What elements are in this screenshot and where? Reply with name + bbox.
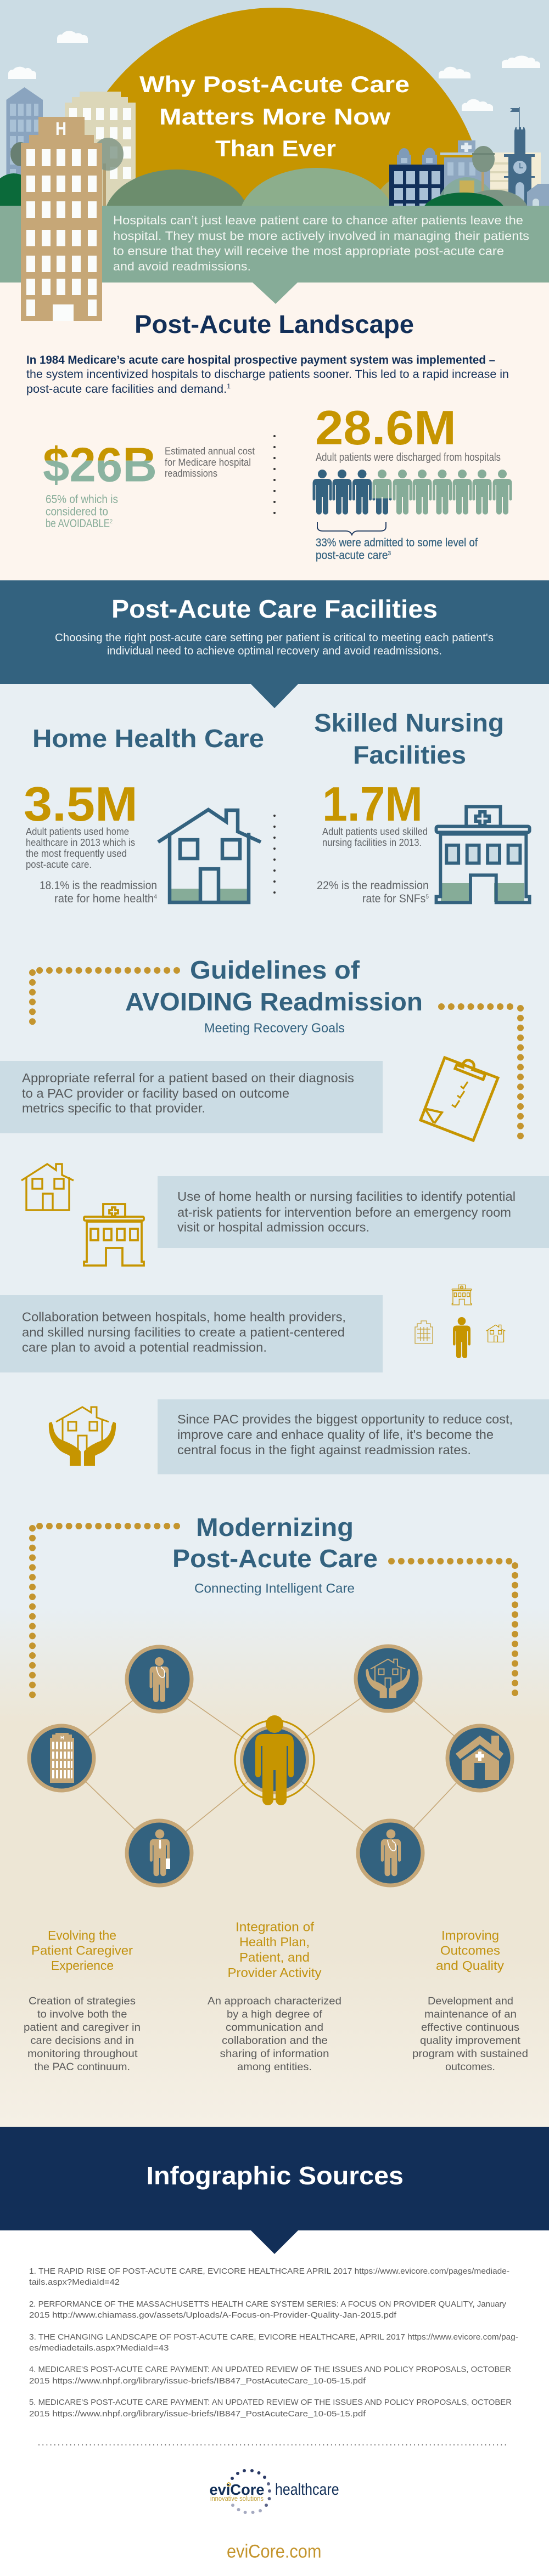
node: central patient <box>235 1715 314 1805</box>
text block: 33% admitted: 3 <box>388 550 391 557</box>
icon: small hospital <box>84 1204 144 1266</box>
column: improving outcomes <box>412 1928 528 2073</box>
column: integration: Integration of <box>236 1920 315 1934</box>
column: improving outcomes: quality improvement <box>420 2035 521 2047</box>
text block: 33% admitted: post-acute care <box>316 549 395 562</box>
column: integration: collaboration and the <box>222 2035 328 2047</box>
text block: sources list: 3. THE CHANGING LANDSCAPE OF POST-ACUTE CARE, EVICORE HEALTHCARE, APRIL 2017 https://www.evicore.com/pag- <box>29 2332 518 2342</box>
column: integration: by a high degree of <box>227 2009 323 2020</box>
panel: facilities band <box>0 580 549 708</box>
column: patient caregiver experience: monitoring throughout <box>27 2048 138 2060</box>
logo: eviCore healthcare <box>210 2469 339 2514</box>
text block: sources list <box>29 2267 518 2419</box>
column: improving outcomes: Development and <box>428 1996 513 2007</box>
panel: guideline 3: and skilled nursing facilities to create a patient-centered <box>22 1325 345 1339</box>
pictogram: ten people <box>313 470 512 515</box>
panel: guideline 2: at-risk patients for intervention before an emergency room <box>177 1205 511 1219</box>
text block: Medicare history: post-acute care facilities and demand. <box>26 383 221 396</box>
title: Than Ever <box>215 135 336 161</box>
column: patient caregiver experience: Creation of strategies <box>29 1996 136 2007</box>
icon: rolling hills <box>0 168 437 271</box>
text block: home health stats: Adult patients used home <box>26 826 129 837</box>
text block: avoidable share <box>46 493 118 530</box>
node: house right <box>447 1726 512 1790</box>
icon: tan hospital tower <box>21 117 102 321</box>
panel: green intro band <box>0 206 549 304</box>
logo: eviCore healthcare: innovative solutions <box>210 2494 264 2502</box>
text block: facilities intro <box>55 631 494 657</box>
text block: home health stats <box>26 826 135 870</box>
icon: gold sun dome <box>64 8 487 430</box>
icon: right tree <box>472 146 495 192</box>
panel: guideline 3 <box>0 1295 383 1372</box>
divider dots <box>273 816 276 893</box>
text block: home health readmission: rate for home health <box>54 892 158 905</box>
icon: large house <box>158 810 261 903</box>
stat: $26B: $26B <box>43 438 157 492</box>
text block: cost caption <box>165 445 255 479</box>
column: patient caregiver experience: the PAC continuum. <box>34 2061 130 2073</box>
text block: sources list: 2. PERFORMANCE OF THE MASSACHUSETTS HEALTH CARE SYSTEM SERIES: A FOCUS ON PROVIDER QUALITY, January <box>29 2300 506 2309</box>
footer link text: eviCore.com <box>227 2541 322 2562</box>
icon: semi-transparent tree <box>93 138 124 206</box>
panel: guideline 1 <box>0 1061 383 1133</box>
text block: facilities intro: individual need to achieve optimal recovery and avoid readmissions. <box>107 645 442 657</box>
subheading: Meeting Recovery Goals: Meeting Recovery Goals <box>204 1021 345 1036</box>
text block: avoidable share: 65% of which is <box>46 493 118 506</box>
text block: sources list: es/mediadetails.aspx?MediaId=43 <box>29 2343 169 2353</box>
caption: discharged patients: Adult patients were discharged from hospitals <box>316 451 501 464</box>
dotted bracket: guidelines <box>32 970 520 1143</box>
heading: Home Health Care: Home Health Care <box>32 724 264 753</box>
icon: clipboard <box>421 1058 498 1140</box>
column: integration: Health Plan, <box>239 1935 310 1949</box>
dotted rule <box>39 2444 508 2445</box>
heading: Post-Acute Landscape: Post-Acute Landscape <box>135 310 414 338</box>
text block: Medicare history: the system incentivized hospitals to discharge patients sooner. This led to a rapid increase in <box>26 368 509 381</box>
node: house in hands top right <box>356 1646 421 1711</box>
text block: home health readmission <box>40 879 157 905</box>
title: Matters More Now <box>159 104 390 129</box>
text block: SNF readmission: 22% is the readmission <box>317 879 429 892</box>
panel: guideline 3: Collaboration between hospitals, home health providers, <box>22 1310 346 1324</box>
node: hospital left: H <box>60 1735 64 1741</box>
text block: sources list: 2015 http://www.chiamass.gov/assets/Uploads/A-Focus-on-Provider-Quality-Jan-2015.pdf <box>29 2311 397 2320</box>
icon: blue clinic with cross <box>436 140 497 245</box>
dotted bracket: modernizing <box>32 1526 515 1695</box>
text block: 33% admitted: 33% were admitted to some level of <box>316 536 478 549</box>
text block: SNF readmission <box>317 879 429 905</box>
icon: navy hospital with domes <box>389 148 444 206</box>
icon: blue building <box>7 87 43 206</box>
text block: avoidable share: be AVOIDABLE <box>46 517 126 530</box>
panel: guideline 2: visit or hospital admission occurs. <box>177 1220 369 1234</box>
text block: facilities intro: Choosing the right post-acute care setting per patient is critical to meeting each patient's <box>55 631 494 644</box>
text block: Medicare history: In 1984 Medicare’s acute care hospital prospective payment system was implemented – <box>26 354 495 366</box>
panel: guideline 1: to a PAC provider or facility based on outcome <box>22 1086 289 1100</box>
node: manager bottom left <box>127 1821 192 1885</box>
icon: house in hands <box>49 1407 116 1466</box>
column: patient caregiver experience: Experience <box>51 1958 114 1973</box>
title <box>139 71 410 161</box>
text block: sources list: 2015 https://www.nhpf.org/library/issue-briefs/IB847_PostAcuteCare_10-05-15.pdf <box>29 2376 366 2386</box>
heading: Guidelines of AVOIDING Readmission: AVOIDING Readmission <box>125 987 423 1016</box>
text block: avoidable share: considered to <box>46 506 108 518</box>
node: doctor top left <box>127 1647 192 1711</box>
column: patient caregiver experience: Patient Caregiver <box>31 1944 133 1958</box>
text block: cost caption: readmissions <box>165 467 217 479</box>
panel: hero skyline <box>0 0 549 430</box>
page background: light blue to cream gradient <box>0 684 549 2127</box>
panel: guideline 2 <box>158 1176 549 1248</box>
text block: SNF readmission: rate for SNFs <box>362 892 431 905</box>
column: integration: An approach characterized <box>208 1996 341 2007</box>
bracket <box>317 522 386 535</box>
text block: 33% admitted <box>316 536 478 562</box>
icon: small house <box>527 184 549 206</box>
stat: 1.7M: 1.7M <box>322 777 423 831</box>
text block: cost caption: for Medicare hospital <box>165 456 251 468</box>
column: integration: Patient, and <box>239 1950 310 1964</box>
text block: home health readmission: 4 <box>154 894 157 900</box>
panel: guideline 2: Use of home health or nursing facilities to identify potential <box>177 1189 516 1204</box>
text block: home health stats: the most frequently used <box>26 848 127 859</box>
logo: eviCore healthcare: eviCore <box>210 2481 265 2498</box>
text block: avoidable share: 2 <box>110 518 113 525</box>
text block: Medicare history: 1 <box>227 382 231 390</box>
heading: Modernizing Post-Acute Care: Modernizing <box>196 1513 354 1541</box>
column: improving outcomes: and Quality <box>436 1958 505 1973</box>
stat: $26B: $26B <box>43 438 157 492</box>
column: improving outcomes: Outcomes <box>440 1944 500 1958</box>
network lines <box>61 1679 480 1853</box>
icon: patient among facilities <box>415 1285 506 1358</box>
heading: Modernizing Post-Acute Care: Post-Acute Care <box>172 1544 378 1573</box>
column: improving outcomes: maintenance of an <box>424 2009 517 2020</box>
heading: Modernizing Post-Acute Care <box>172 1513 378 1573</box>
text block: intro: and avoid readmissions. <box>113 259 251 273</box>
stat: 3.5M: 3.5M <box>24 777 138 831</box>
icon: left tree <box>10 142 30 166</box>
panel: sources band <box>0 2127 549 2254</box>
column: patient caregiver experience: to involve both the <box>37 2009 127 2020</box>
heading: Infographic Sources: Infographic Sources <box>146 2161 404 2190</box>
column: patient caregiver experience: patient and caregiver in <box>24 2022 141 2033</box>
column: integration: sharing of information <box>220 2048 329 2060</box>
column: improving outcomes: effective continuous <box>421 2022 519 2033</box>
column: patient caregiver experience: care decisions and in <box>31 2035 134 2047</box>
column: integration: among entities. <box>237 2061 312 2073</box>
subheading: Connecting Intelligent Care: Connecting Intelligent Care <box>194 1581 355 1596</box>
heading: Skilled Nursing Facilities: Facilities <box>353 741 466 769</box>
column: patient caregiver experience: Evolving the <box>48 1928 116 1942</box>
panel: cream landscape background <box>0 283 549 580</box>
heading: Guidelines of AVOIDING Readmission <box>125 956 423 1016</box>
divider dots <box>273 436 276 513</box>
text block: cost caption: Estimated annual cost <box>165 445 255 457</box>
heading: Skilled Nursing Facilities <box>314 709 504 769</box>
icon: clouds <box>8 31 540 111</box>
node: hospital left <box>29 1726 94 1790</box>
icon: beige building <box>65 92 136 206</box>
text block: home health readmission: 18.1% is the readmission <box>40 879 157 892</box>
text block: sources list: 2015 https://www.nhpf.org/library/issue-briefs/IB847_PostAcuteCare_10-05-15.pdf <box>29 2409 366 2419</box>
panel: guideline 3: care plan to avoid a potential readmission. <box>22 1340 267 1354</box>
text block: SNF readmission: 5 <box>425 894 429 900</box>
text block: sources list: 4. MEDICARE'S POST-ACUTE CARE PAYMENT: AN UPDATED REVIEW OF THE ISSUES AND POLICY PROPOSALS, OCTOBER <box>29 2365 511 2374</box>
heading: Skilled Nursing Facilities: Skilled Nursing <box>314 709 504 737</box>
text block: intro <box>113 213 529 273</box>
icon: large hospital <box>436 807 530 902</box>
icon: tan hospital tower: H <box>55 118 66 139</box>
text block: home health stats: healthcare in 2013 which is <box>26 837 135 848</box>
text block: sources list: tails.aspx?MediaId=42 <box>29 2278 120 2287</box>
text block: skilled nursing stats <box>322 826 428 848</box>
column: improving outcomes: program with sustained <box>412 2048 528 2060</box>
text block: intro: to ensure that they will receive the most appropriate post-acute care <box>113 244 504 258</box>
column: integration: Provider Activity <box>227 1965 322 1980</box>
text block: skilled nursing stats: Adult patients used skilled <box>322 826 428 837</box>
panel: guideline 1: metrics specific to that provider. <box>22 1101 205 1115</box>
column: improving outcomes: outcomes. <box>445 2061 495 2073</box>
icon: right hills <box>423 190 528 233</box>
text block: skilled nursing stats: nursing facilities in 2013. <box>322 837 422 848</box>
stat: 28.6M: 28.6M <box>315 400 456 455</box>
text block: sources list: 1. THE RAPID RISE OF POST-ACUTE CARE, EVICORE HEALTHCARE APRIL 2017 https://www.evicore.com/pages/mediade- <box>29 2267 509 2276</box>
text block: home health stats: post-acute care. <box>26 858 92 870</box>
icon: small house <box>21 1164 74 1210</box>
column: integration <box>208 1920 341 2073</box>
panel: guideline 1: Appropriate referral for a patient based on their diagnosis <box>22 1071 354 1085</box>
panel: guideline 4: improve care and enhace quality of life, it's become the <box>177 1427 494 1442</box>
text block: sources list: 5. MEDICARE'S POST-ACUTE CARE PAYMENT: AN UPDATED REVIEW OF THE ISSUES AND POLICY PROPOSALS, OCTOBER <box>29 2398 512 2407</box>
icon: clock tower <box>504 107 535 206</box>
icon: right beige building <box>490 152 541 206</box>
node: doctor bottom right <box>358 1821 423 1885</box>
title: Why Post-Acute Care <box>139 71 410 97</box>
column: patient caregiver experience <box>24 1928 141 2073</box>
heading: Guidelines of AVOIDING Readmission: Guidelines of <box>190 956 360 984</box>
panel: guideline 4: Since PAC provides the biggest opportunity to reduce cost, <box>177 1412 513 1426</box>
text block: intro: hospital. They must be more actively involved in managing their patients <box>113 229 529 242</box>
text block: Medicare history <box>26 354 509 396</box>
panel: guideline 4 <box>158 1399 549 1475</box>
logo: eviCore healthcare: healthcare <box>275 2481 339 2499</box>
panel: guideline 4: central focus in the fight against readmission rates. <box>177 1443 471 1457</box>
heading: Post-Acute Care Facilities: Post-Acute Care Facilities <box>111 595 438 623</box>
column: improving outcomes: Improving <box>441 1928 499 1942</box>
text block: intro: Hospitals can’t just leave patient care to chance after patients leave the <box>113 213 523 227</box>
column: integration: communication and <box>226 2022 323 2033</box>
